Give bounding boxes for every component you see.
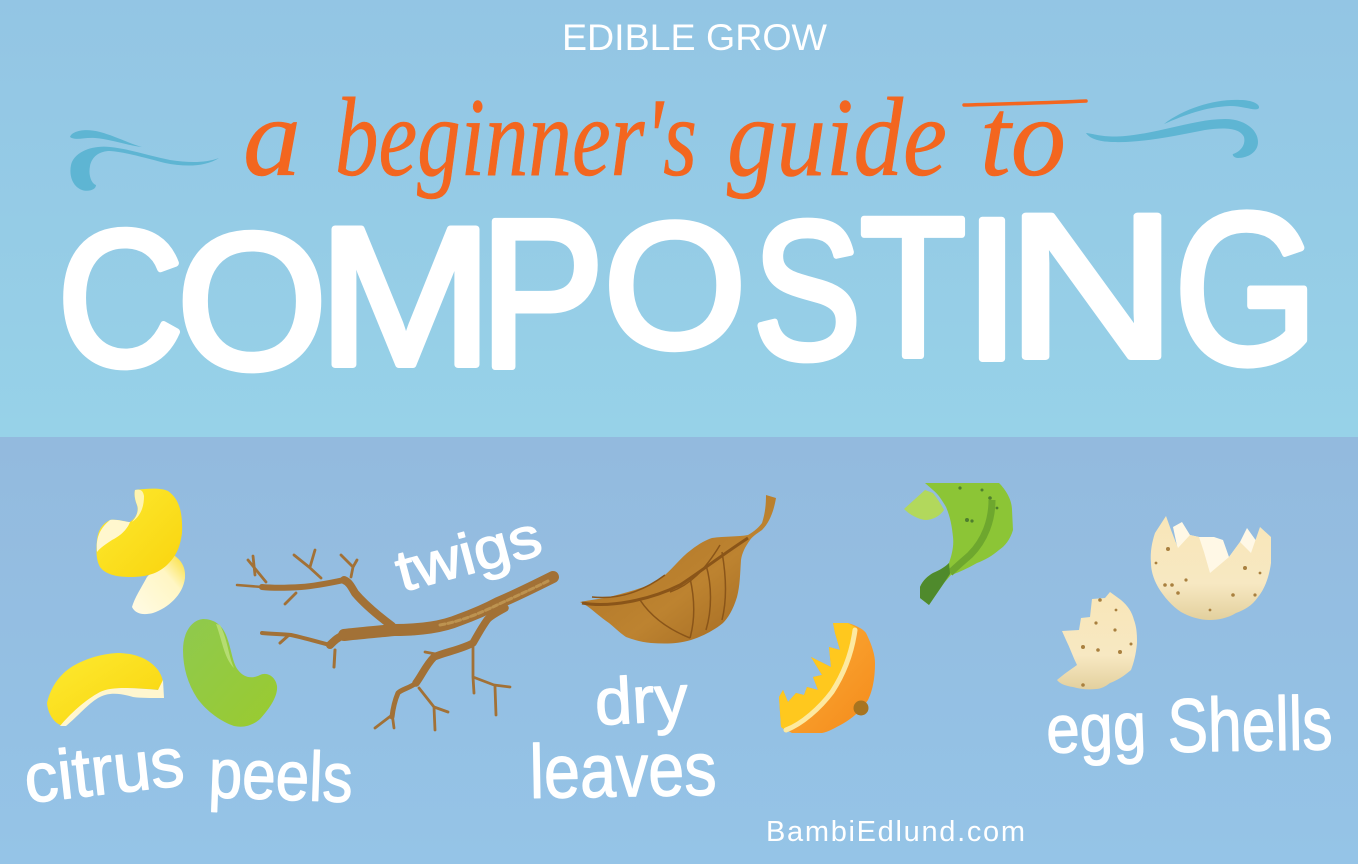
label: dry leaves: dry [593, 660, 690, 739]
title: COMPOSTING: T [860, 176, 966, 398]
title: COMPOSTING: P [480, 176, 604, 412]
title: crossbar of t [964, 101, 1086, 105]
label: dry leaves: leaves [529, 727, 717, 815]
title: COMPOSTING: C [58, 190, 184, 406]
icon: lime peel [183, 619, 277, 727]
label: egg: egg [1045, 689, 1147, 768]
title: COMPOSTING: G [1174, 168, 1318, 409]
icon: right flourish [1086, 100, 1259, 158]
publisher heading: EDIBLE GROW [562, 17, 827, 58]
title: COMPOSTING: N [1006, 172, 1176, 400]
title: COMPOSTING: O [604, 186, 746, 385]
title: COMPOSTING: O [177, 193, 327, 409]
icon: small egg shell [1057, 592, 1137, 689]
icon: dry leaf [580, 495, 776, 644]
panel: header background [0, 0, 1358, 437]
icon: left flourish [70, 130, 219, 191]
title: a beginner's guide to: beginner's [335, 76, 697, 200]
panel: ingredients background [0, 437, 1358, 864]
title: a beginner's guide to: a [243, 76, 301, 200]
icon: orange peel [779, 623, 875, 733]
title: COMPOSTING: I [964, 176, 1020, 402]
icon: citrus peel top [96, 489, 185, 614]
label: dry leaves [529, 660, 717, 815]
credit: BambiEdlund.com [766, 816, 1025, 848]
title: COMPOSTING [58, 168, 1318, 412]
icon: large egg shell [1151, 516, 1271, 620]
icon: twig [237, 550, 553, 730]
label: twigs: twigs [389, 503, 548, 605]
title: a beginner's guide to: guide [727, 76, 947, 200]
icon: green leaf [904, 483, 1013, 605]
title: COMPOSTING: S [753, 181, 861, 400]
label: peels: peels [207, 734, 354, 817]
label: citrus: citrus [20, 722, 188, 818]
title: a beginner's guide to [243, 76, 1066, 200]
title: COMPOSTING: M [318, 186, 493, 406]
title: a beginner's guide to: to [980, 76, 1066, 200]
icon: citrus peel left [47, 653, 164, 726]
